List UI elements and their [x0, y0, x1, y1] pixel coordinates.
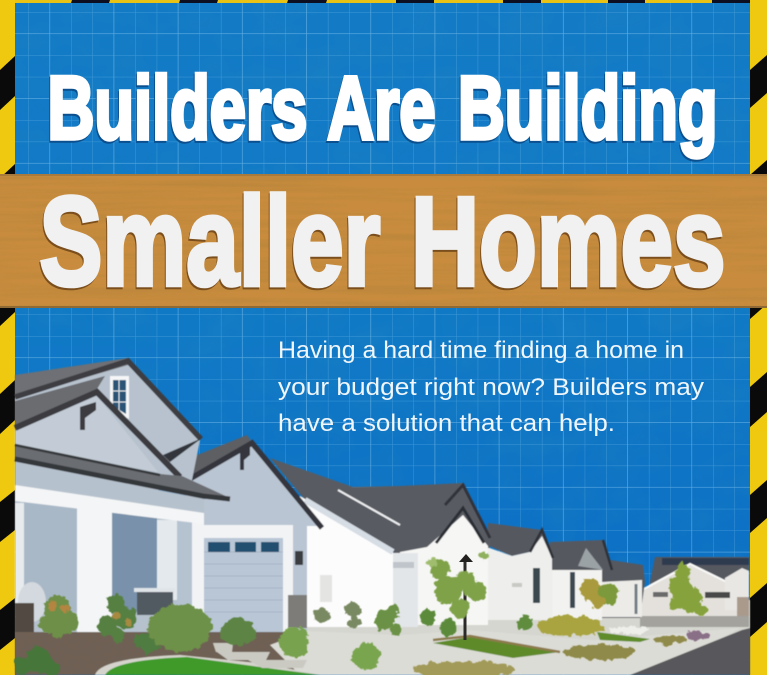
lamp post — [459, 554, 473, 640]
intro text: have a solution that can help. — [278, 410, 615, 437]
main house lower roof and walls — [15, 445, 230, 640]
hazard stripe border: left — [0, 0, 15, 675]
house 3 — [484, 523, 553, 620]
intro text — [278, 337, 705, 437]
house shrubs — [39, 595, 78, 638]
garage house — [160, 435, 322, 632]
ground base — [15, 600, 750, 675]
wood plank banner — [0, 174, 767, 308]
house 5 — [600, 560, 645, 618]
flower beds — [536, 616, 604, 636]
intro text: your budget right now? Builders may — [278, 374, 705, 401]
white house wall — [300, 496, 393, 627]
trees, lamp post and shrubs — [15, 551, 709, 675]
intro text: Having a hard time finding a home in — [278, 337, 684, 364]
photo: street of new homes — [15, 358, 750, 675]
main house upper gable — [15, 358, 202, 490]
far right house — [640, 557, 749, 627]
sidewalks and lawn — [15, 628, 750, 675]
house 4 — [545, 540, 612, 620]
houses — [15, 358, 750, 675]
trees — [15, 551, 709, 675]
foundation plants — [313, 602, 361, 628]
hazard stripe border: top — [0, 0, 767, 3]
hazard stripe border: right — [750, 0, 767, 675]
house 2 — [270, 458, 490, 627]
